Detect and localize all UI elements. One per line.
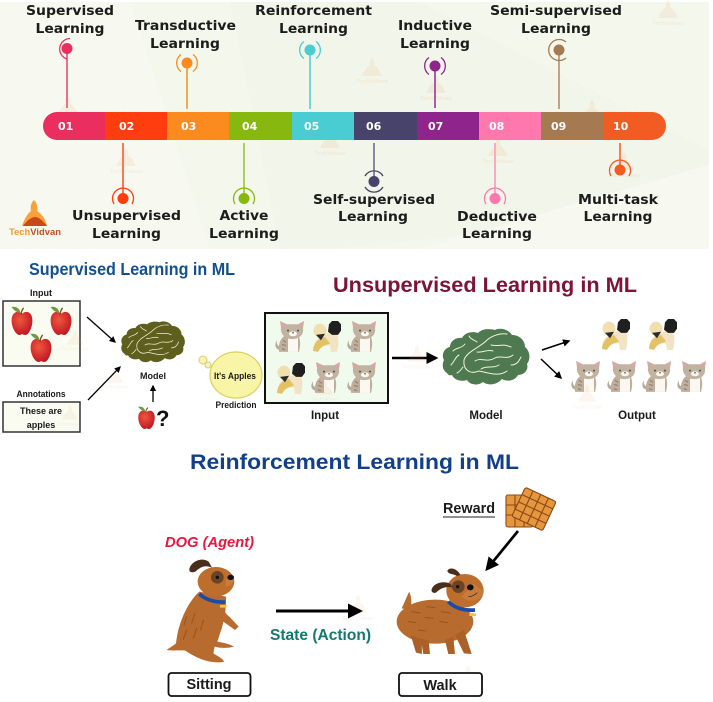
label: model: Model	[140, 371, 166, 381]
timeline bar: 06	[366, 120, 382, 133]
pin: supervised learning	[60, 38, 72, 108]
pin: transductive learning	[177, 54, 197, 109]
timeline bar: 03	[181, 120, 196, 133]
label: inductive learning: Inductive	[398, 18, 472, 34]
icon: waffle reward	[506, 487, 556, 531]
label: self-supervised learning: Self-supervised	[313, 192, 435, 208]
pin: unsupervised learning	[113, 143, 134, 204]
arrow: model to cats	[541, 359, 561, 378]
icon: apple question: ?	[156, 406, 169, 431]
box: sitting state	[168, 673, 250, 696]
arrow: state transition	[276, 610, 360, 612]
arrow: input to model	[392, 357, 436, 359]
arrow: model to pugs	[542, 341, 569, 350]
pin: self-supervised learning	[365, 143, 383, 192]
label: semi-supervised learning: Learning	[521, 21, 591, 37]
label: supervised learning: Supervised	[26, 3, 114, 19]
label: model: Model	[469, 410, 503, 422]
watermarks: timeline	[52, 0, 685, 179]
label: reward: Reward	[443, 501, 495, 517]
icon: apple question	[138, 406, 169, 431]
label: deductive learning: Deductive	[457, 209, 537, 225]
arrow: input to model	[87, 317, 115, 342]
label: deductive learning	[457, 209, 537, 242]
icon: brain model	[443, 329, 529, 384]
label: dog agent: DOG (Agent)	[165, 534, 254, 551]
timeline bar	[43, 112, 666, 140]
box: walk state	[399, 673, 482, 696]
timeline bar: 02	[119, 120, 134, 133]
label: multi-task learning	[578, 192, 659, 225]
box: annotation note	[3, 402, 80, 432]
logo: TechVidvan	[9, 200, 61, 238]
label: reinforcement learning: Reinforcement	[255, 3, 373, 19]
label: self-supervised learning: Learning	[338, 209, 408, 225]
icon: brain model	[121, 321, 185, 362]
panel: unsupervised learning diagram	[265, 313, 706, 422]
label: supervised learning	[26, 3, 114, 37]
heading: unsupervised learning in ML: Unsupervised Learning in ML	[333, 274, 637, 297]
label: input: Input	[311, 410, 339, 422]
label: transductive learning: Transductive	[135, 18, 236, 34]
arrow: reward to dog	[487, 531, 518, 569]
box: walk state: Walk	[423, 678, 458, 694]
label: inductive learning	[398, 18, 472, 52]
icon: walking dog	[397, 569, 484, 654]
box: sitting state: Sitting	[186, 677, 232, 693]
label: reinforcement learning	[255, 3, 373, 37]
callout: prediction bubble	[199, 352, 262, 398]
logo: TechVidvan: TechVidvan	[9, 227, 61, 238]
label: supervised learning: Learning	[36, 21, 104, 37]
label: semi-supervised learning	[490, 3, 622, 37]
icon: sitting dog	[167, 560, 239, 662]
panel: supervised learning diagram	[3, 288, 262, 432]
label: active learning: Active	[220, 208, 268, 224]
pin: deductive learning	[484, 143, 506, 204]
label: multi-task learning: Multi-task	[578, 192, 659, 208]
label: multi-task learning: Learning	[584, 209, 652, 225]
label: active learning	[209, 208, 279, 242]
label: inductive learning: Learning	[400, 36, 470, 52]
label: output: Output	[618, 410, 656, 422]
panel: timeline background	[0, 2, 709, 249]
pin: active learning	[234, 143, 254, 204]
label: transductive learning	[135, 18, 236, 52]
label: transductive learning: Learning	[150, 36, 220, 52]
watermarks: diagrams	[57, 330, 602, 692]
timeline bar: 10	[613, 120, 629, 133]
pin: semi-supervised learning	[549, 40, 566, 109]
label: input: Input	[30, 288, 52, 298]
label: unsupervised learning	[72, 208, 181, 242]
arrow: annotations to model	[88, 367, 120, 400]
label: deductive learning: Learning	[462, 226, 532, 242]
label: active learning: Learning	[209, 226, 279, 242]
label: unsupervised learning: Learning	[92, 226, 161, 242]
timeline bar: 08	[489, 120, 504, 133]
box: input animals	[265, 313, 388, 403]
heading: supervised learning in ML: Supervised Learning in ML	[29, 259, 235, 279]
timeline bar: 04	[242, 120, 258, 133]
label: unsupervised learning: Unsupervised	[72, 208, 181, 224]
timeline bar: 07	[428, 120, 443, 133]
label: self-supervised learning	[313, 192, 435, 225]
box: input apples	[3, 301, 80, 366]
arrow: query to model	[152, 386, 154, 402]
label: annotations: Annotations	[16, 389, 66, 399]
pin: reinforcement learning	[300, 42, 320, 109]
label: prediction: Prediction	[216, 400, 256, 410]
heading: reinforcement learning in ML: Reinforcement Learning in ML	[190, 451, 519, 474]
panel: reinforcement learning diagram	[165, 487, 556, 696]
group: output animals	[571, 319, 706, 392]
box: annotation note: These are	[20, 406, 62, 416]
pin: inductive learning	[425, 58, 445, 108]
timeline bar: 05	[304, 120, 319, 133]
callout: prediction bubble: It's Apples	[214, 371, 256, 381]
pin: multi-task learning	[610, 143, 630, 176]
timeline bar: 01	[58, 120, 73, 133]
timeline bar: 09	[551, 120, 566, 133]
box: annotation note: apples	[27, 420, 55, 430]
label: reinforcement learning: Learning	[279, 21, 348, 37]
label: semi-supervised learning: Semi-supervised	[490, 3, 622, 19]
label: state action: State (Action)	[270, 627, 371, 644]
